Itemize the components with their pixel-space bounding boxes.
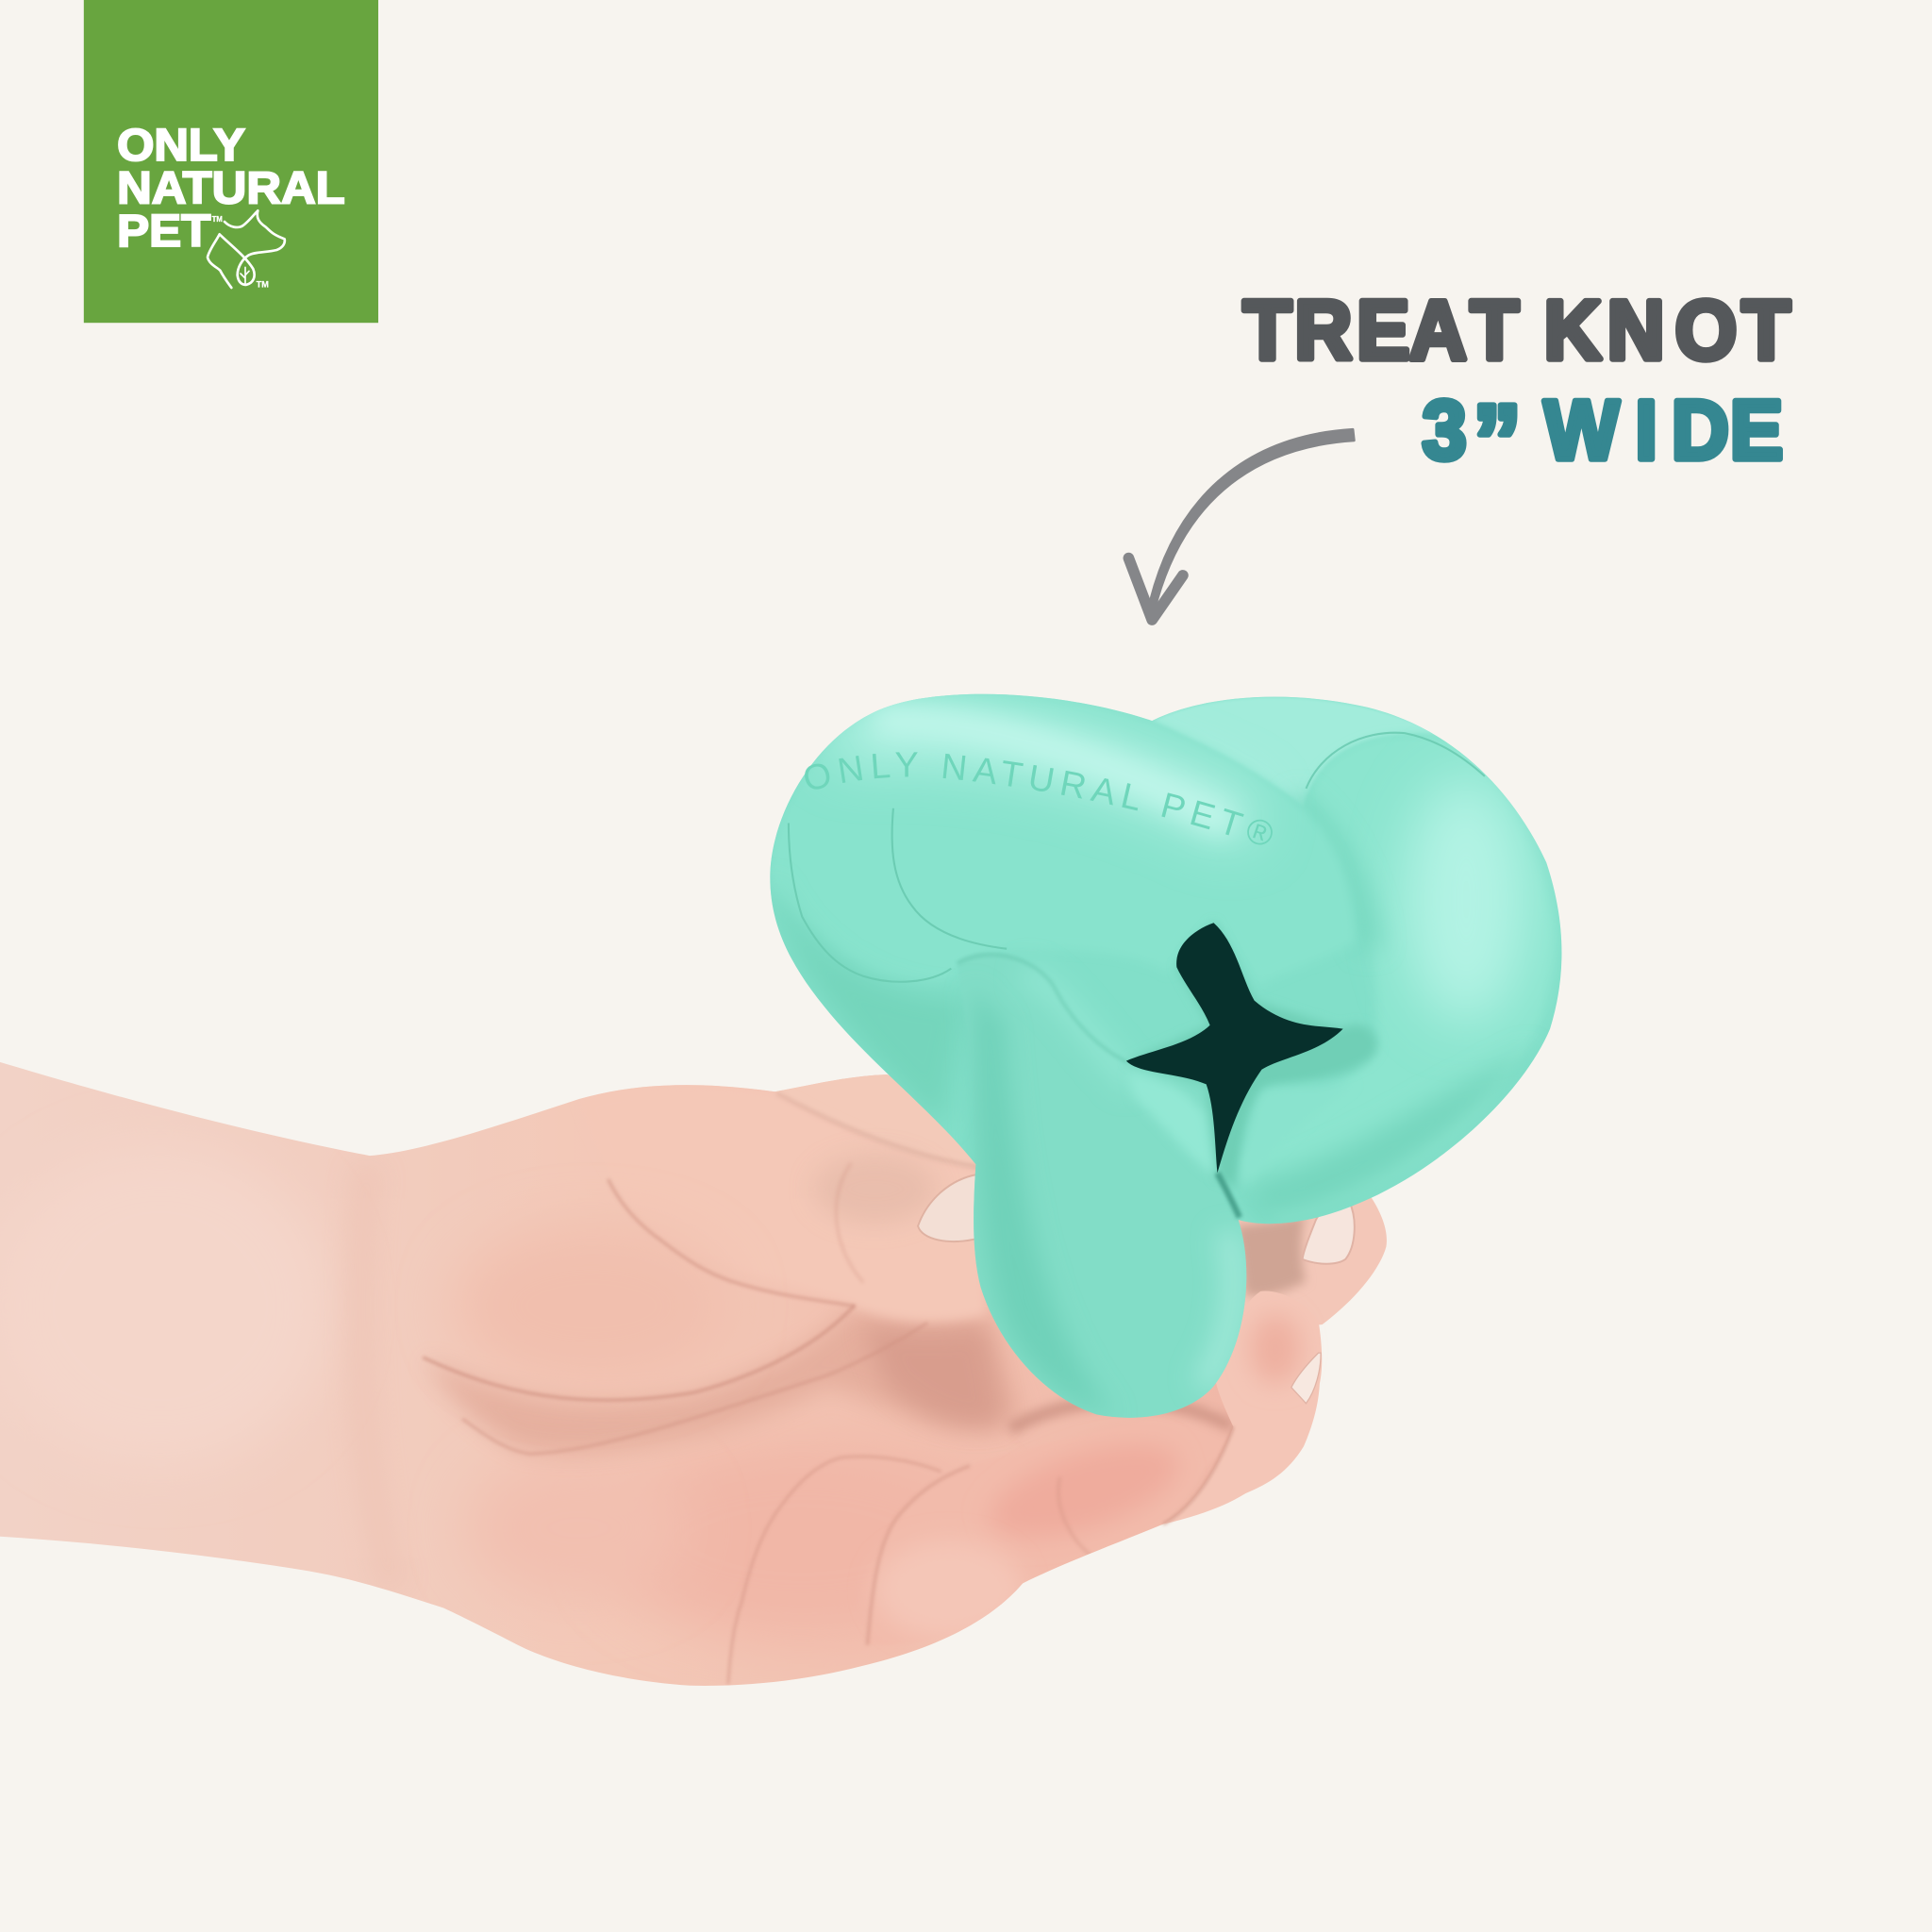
logo wordmark: NATURAL [117,163,345,214]
logo wordmark [117,120,345,289]
heading: product size [1423,382,1783,498]
finger: back finger tip behind toy [1232,1194,1387,1331]
icon: dog, cat and leaf logo mark [208,210,285,288]
heading: product name: TREAT KNOT [1243,285,1790,377]
arrow [1128,429,1354,620]
icon: fingernail on back finger [1303,1201,1355,1264]
shadow under thumb [424,1306,1023,1453]
toy lower-left shadow [773,908,958,1121]
heading: product size: WIDE [1529,385,1783,477]
toy seam lines [789,733,1485,982]
logo panel [84,0,378,323]
icon: fingernail on lower finger [1291,1353,1321,1404]
treat knot toy [770,694,1562,1418]
hole socket [1136,975,1379,1186]
big finger over palm [1036,1530,1148,1577]
thenar pad and thumb [774,1093,985,1323]
palm creases [424,1164,1091,1683]
finger behind thumb [846,1074,974,1163]
toy embossed text: ONLY NATURAL PET® [805,752,1273,845]
heading: product size: 3 [1423,385,1467,477]
toy cross-shaped treat hole [1126,923,1343,1173]
logo wordmark: ONLY [117,120,245,171]
photo: hand holding toy [0,1047,1387,1700]
heading: product size: ” [1473,382,1522,498]
hand and arm [0,1062,1234,1686]
toy back strand [1152,697,1448,808]
finger: lower finger [1163,1291,1322,1524]
icon: thumbnail [918,1174,978,1241]
logo wordmark: TM [257,279,269,289]
toy hanging front strand [974,1166,1247,1418]
toy right lobe [1273,734,1548,1164]
logo wordmark: PET [117,206,210,257]
palm tone [659,1451,919,1628]
wrist tone [154,1188,313,1426]
toy top-left strand [770,694,1353,940]
crease between strands [1293,801,1370,949]
logo wordmark: TM [212,215,223,224]
